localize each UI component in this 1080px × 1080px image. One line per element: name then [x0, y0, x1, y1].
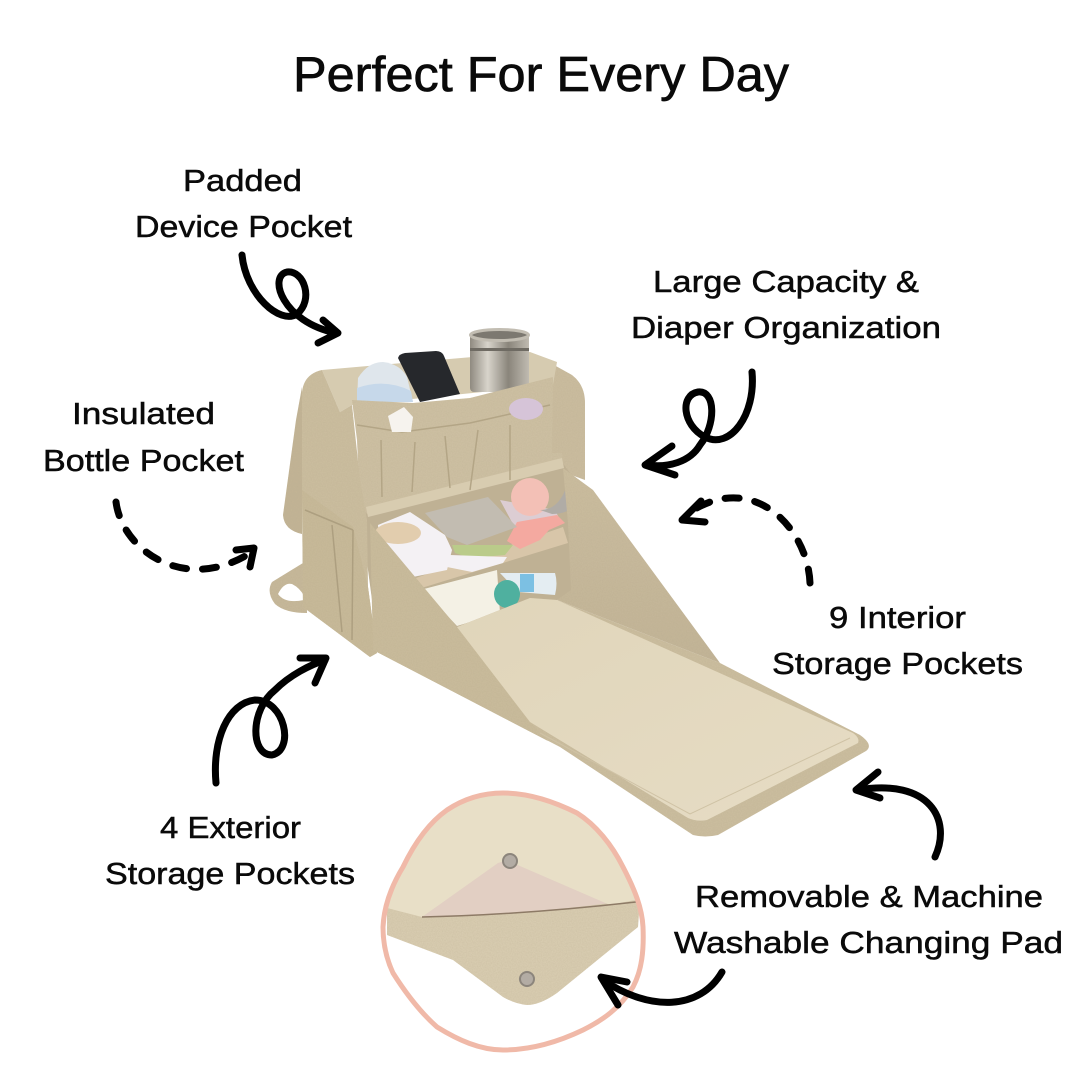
backpack illustration — [270, 330, 869, 836]
towels and clothes — [378, 497, 517, 578]
top rim — [322, 352, 557, 412]
snap: lower — [520, 972, 534, 986]
top pouch — [352, 377, 563, 514]
spork — [388, 407, 413, 432]
changing pad linen base — [373, 598, 869, 836]
arrow: large capacity — [645, 372, 752, 475]
side mesh pocket — [302, 490, 377, 657]
right flap interior — [557, 468, 720, 663]
steel flask — [470, 330, 529, 392]
shelf board — [410, 527, 568, 590]
label: insulated bottle pocket: Insulated — [72, 396, 215, 431]
pink lining — [422, 860, 610, 917]
back interior wall — [545, 360, 585, 480]
lilac pacifier — [509, 398, 543, 420]
pouch flange — [366, 458, 564, 517]
label: padded device pocket — [135, 163, 352, 244]
title: Perfect For Every Day — [293, 48, 790, 102]
arrow: exterior storage pockets — [215, 658, 326, 783]
pink outline — [383, 793, 643, 1050]
arrow: changing pad — [856, 772, 940, 857]
linen underside — [387, 900, 640, 1005]
label: 9 interior storage pockets: Storage Pockets — [772, 646, 1023, 681]
label: 9 interior storage pockets: 9 Interior — [829, 600, 966, 635]
snap: upper — [503, 854, 517, 868]
back flap — [283, 387, 302, 534]
arrow: interior storage pockets — [682, 498, 810, 583]
label: removable changing pad: Washable Changing Pad — [674, 925, 1063, 960]
label: 4 exterior storage pockets: Storage Pockets — [105, 856, 355, 891]
pink bowl — [507, 515, 565, 549]
fold shadow — [422, 902, 636, 917]
label: padded device pocket: Device Pocket — [135, 209, 352, 244]
pad seam — [540, 733, 850, 814]
changing pad cream top — [457, 598, 858, 821]
label: removable changing pad — [674, 879, 1063, 960]
lotion tube — [500, 573, 556, 595]
mesh pocket seams — [305, 510, 353, 640]
diapers — [420, 570, 500, 626]
interior backing — [360, 462, 575, 628]
label: large capacity and diaper organization: Large Capacity & — [653, 264, 919, 299]
teether — [375, 522, 421, 544]
phone — [398, 351, 460, 402]
snail toy — [511, 478, 577, 516]
shoulder strap — [270, 563, 307, 613]
label: insulated bottle pocket — [43, 396, 244, 478]
arrow: padded device pocket — [242, 255, 338, 343]
label: large capacity and diaper organization — [631, 264, 941, 345]
inset: changing pad close-up — [375, 785, 655, 1050]
items on top — [357, 330, 529, 402]
label: 4 exterior storage pockets: 4 Exterior — [160, 810, 301, 845]
label: large capacity and diaper organization: Diaper Organization — [631, 310, 941, 345]
arrow: insulated bottle pocket — [116, 502, 254, 569]
label: 9 interior storage pockets — [772, 600, 1023, 681]
label: removable changing pad: Removable & Machine — [695, 879, 1043, 914]
left side panel — [302, 370, 377, 657]
front side panel — [370, 523, 548, 741]
label: padded device pocket: Padded — [183, 163, 302, 198]
green pacifier — [494, 580, 520, 608]
cream top layer — [388, 796, 635, 917]
baby bottle — [357, 362, 413, 402]
lilac plate — [500, 500, 560, 528]
label: 4 exterior storage pockets — [105, 810, 355, 891]
arrow: inset pad — [601, 972, 722, 1005]
label: insulated bottle pocket: Bottle Pocket — [43, 443, 244, 478]
pouch seams and pleats — [357, 405, 550, 497]
